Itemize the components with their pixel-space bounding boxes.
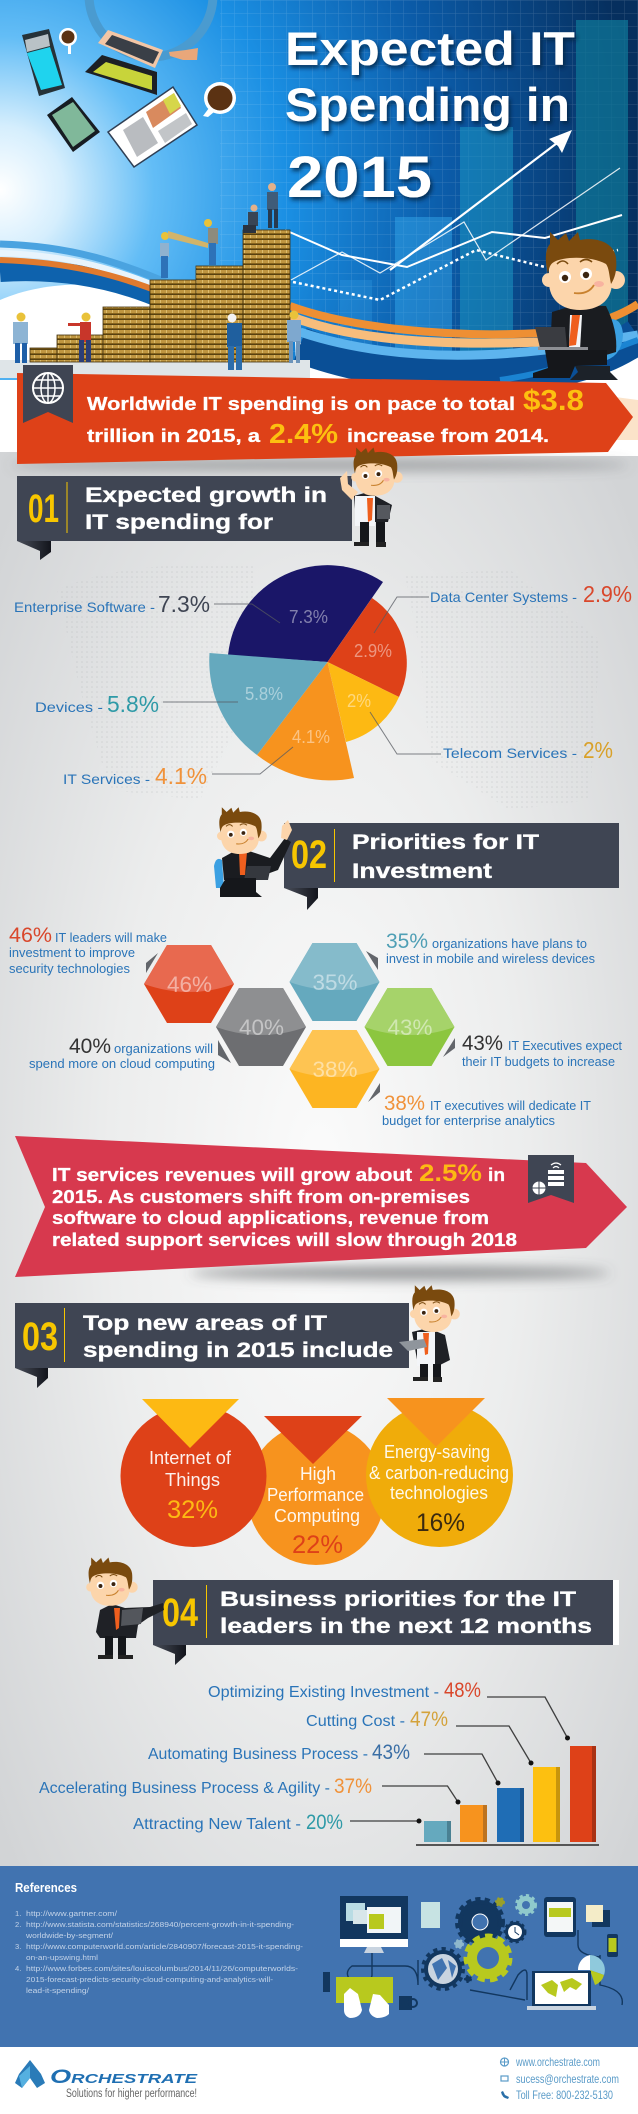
circle: internet of things (120, 1399, 266, 1547)
panel: red headline banner: 2.4% (269, 418, 338, 449)
circle: energy saving: Energy-saving (384, 1441, 490, 1462)
circle: internet of things: Internet of (149, 1447, 232, 1468)
coin stacks (30, 230, 290, 362)
pie labels: Enterprise Software - (14, 599, 155, 615)
icon: globe bookmark (23, 365, 73, 423)
pie labels: 7.3% (158, 591, 210, 617)
pie labels: IT Services - (63, 771, 150, 787)
bar chart: business priorities (350, 1697, 599, 1846)
pie chart: 5.8% (245, 684, 283, 704)
text: 40 percent: organizations will (114, 1041, 213, 1056)
bar chart labels: 48% (444, 1679, 481, 1702)
references list (15, 1880, 304, 1995)
references list: 2015-forecast-predicts-security-cloud-computing-and-analytics-will- (26, 1975, 274, 1984)
character: man with laptop giving ok sign (214, 807, 292, 897)
section 03 heading: spending in 2015 include (83, 1339, 393, 1362)
references list: worldwide-by-segment/ (25, 1931, 114, 1940)
title: Spending in (285, 78, 570, 131)
hexagon 38: 38% (312, 1057, 358, 1082)
bar chart labels: 20% (306, 1811, 343, 1834)
references list: on-an-upswing.html (26, 1953, 98, 1962)
text: 40 percent: 40% (69, 1035, 111, 1058)
pie labels: 2.9% (583, 581, 632, 607)
references list: 3. (15, 1942, 21, 1951)
hexagon 46: 46% (167, 972, 212, 997)
pie chart: 4.1% (292, 727, 330, 747)
pie chart: 2% (347, 691, 371, 711)
section 01 heading: IT spending for (85, 511, 273, 534)
references list: http://www.statista.com/statistics/268940/percent-growth-in-it-spending- (26, 1920, 295, 1929)
bar chart labels: 43% (372, 1741, 410, 1764)
illustration: technology devices and gears (323, 1896, 622, 2018)
section 03 heading: 03 (22, 1315, 58, 1359)
keyboard and hands (323, 1972, 417, 2018)
circle: internet of things: Things (165, 1469, 220, 1490)
hexagon cluster (144, 943, 455, 1108)
panel: crimson callout banner: 2015. As customers shift from on-premises (52, 1187, 470, 1207)
tablet (544, 1897, 576, 1937)
text: 46 percent: investment to improve (9, 945, 135, 960)
circle: high performance computing: Performance (267, 1484, 364, 1505)
panel: red headline banner: Worldwide IT spending is on pace to total (87, 394, 515, 414)
circle: high performance computing: 22% (292, 1531, 343, 1559)
panel: white company footer (0, 2047, 638, 2114)
hexagon 38 (290, 1030, 380, 1108)
text: 43 percent: IT Executives expect (508, 1038, 622, 1053)
circle: energy saving: 16% (416, 1509, 465, 1537)
references list: 4. (15, 1964, 21, 1973)
bar chart labels: Automating Business Process - (148, 1746, 368, 1763)
title (285, 22, 575, 210)
text: 46 percent: IT leaders will make (55, 930, 167, 945)
section 01 heading (17, 476, 352, 560)
panel: red headline banner (10, 365, 633, 471)
section 02 heading: 02 (291, 833, 327, 877)
hexagon 35 (290, 943, 380, 1021)
text: 35 percent: organizations have plans to (432, 936, 587, 951)
contact details: www.orchestrate.com (515, 2055, 600, 2069)
character: man pointing (340, 447, 403, 547)
icon: mail (501, 2076, 508, 2081)
references list: 1. (15, 1909, 21, 1918)
hexagon 35: 35% (312, 970, 358, 995)
document (421, 1902, 440, 1928)
text: 43 percent: their IT budgets to increase (462, 1054, 615, 1069)
background: gray body (0, 440, 638, 1870)
circle: high performance computing: Computing (274, 1505, 360, 1526)
title: Expected IT (285, 22, 575, 75)
section 02 heading: Investment (352, 860, 492, 883)
bar chart labels: 37% (334, 1775, 372, 1798)
bar chart labels: Cutting Cost - (306, 1713, 405, 1730)
hexagon 40 (216, 988, 306, 1066)
text: 35 percent (386, 930, 595, 966)
circle: energy saving (366, 1398, 513, 1547)
section 04 heading: leaders in the next 12 months (220, 1615, 592, 1638)
section 04 heading: 04 (162, 1591, 199, 1635)
pie labels: 4.1% (155, 763, 207, 789)
world map dots (57, 564, 600, 810)
gears (424, 1896, 535, 1988)
hexagon 40: 40% (239, 1015, 284, 1040)
panel: crimson callout banner: 2.5% (419, 1160, 482, 1187)
circle: energy saving: & carbon-reducing (369, 1462, 509, 1483)
bar chart labels: 47% (410, 1708, 448, 1731)
panel: red headline banner: increase from 2014. (347, 426, 549, 446)
character: man with laptop (533, 232, 625, 380)
text: 43 percent (462, 1032, 622, 1069)
text: 38 percent: budget for enterprise analytics (382, 1113, 555, 1128)
pie labels: Data Center Systems - (430, 589, 577, 605)
text: 40 percent (29, 1035, 215, 1071)
section 02 heading (284, 823, 619, 910)
bar chart labels (39, 1679, 481, 1834)
panel: crimson callout banner: related support services will slow through 2018 (52, 1230, 517, 1250)
bar chart labels: Optimizing Existing Investment - (208, 1684, 439, 1701)
pie labels: Devices - (35, 699, 103, 715)
pie labels: 5.8% (107, 691, 159, 717)
contact details (500, 2055, 619, 2102)
logo: Orchestrate: Solutions for higher performance! (66, 2088, 197, 2100)
laptop (527, 1971, 596, 2010)
speech bubbles (586, 1905, 610, 1927)
text: 35 percent: invest in mobile and wireless devices (386, 951, 595, 966)
icon: phone (501, 2091, 509, 2099)
circles: top new areas (120, 1398, 513, 1565)
section 04 heading (153, 1580, 619, 1665)
icon: web (500, 2058, 508, 2066)
hexagon 43 (364, 988, 454, 1066)
pie labels: 2% (583, 737, 613, 763)
pie chart: 2.9% (354, 641, 392, 661)
pie chart (163, 565, 441, 780)
panel: crimson callout banner (15, 1136, 627, 1280)
section 04 heading: Business priorities for the IT (220, 1588, 576, 1611)
text: 46 percent: 46% (9, 924, 52, 947)
references list: http://www.gartner.com/ (26, 1909, 118, 1918)
character: man with tablet (399, 1285, 460, 1382)
section 03 heading (15, 1303, 409, 1388)
bar chart labels: Attracting New Talent - (133, 1816, 301, 1833)
hexagon 46 (144, 945, 234, 1023)
section 01 heading: Expected growth in (85, 484, 327, 507)
section 03 heading: Top new areas of IT (83, 1312, 327, 1335)
hexagon 43: 43% (388, 1015, 432, 1040)
text: 43 percent: 43% (462, 1032, 503, 1055)
text: 38 percent: 38% (384, 1092, 425, 1115)
pie labels (14, 581, 632, 789)
panel: crimson callout banner: in (488, 1165, 505, 1185)
text: 38 percent: IT executives will dedicate IT (430, 1098, 591, 1113)
text: 38 percent (382, 1092, 591, 1128)
pie icon (578, 1955, 605, 1985)
text: 40 percent: spend more on cloud computing (29, 1056, 215, 1071)
character: man presenting (86, 1557, 164, 1659)
pie chart: 7.3% (289, 607, 328, 627)
icons: desk devices from above (22, 0, 236, 167)
logo: Orchestrate (15, 2060, 197, 2100)
references list: lead-it-spending/ (26, 1986, 90, 1995)
panel: references footer (0, 1866, 638, 2047)
circle: high performance computing (247, 1416, 385, 1565)
hero illustration (0, 0, 638, 456)
references list: References (15, 1880, 77, 1895)
panel: crimson callout banner: software to cloud applications, revenue from (52, 1208, 489, 1228)
title: 2015 (287, 145, 432, 210)
panel: crimson callout banner: IT services revenues will grow about (52, 1165, 412, 1185)
panel: red headline banner: trillion in 2015, a (87, 426, 261, 446)
section 01 heading: 01 (28, 487, 59, 531)
references list: http://www.computerworld.com/article/2840907/forecast-2015-it-spending- (26, 1942, 304, 1951)
phone (607, 1934, 618, 1957)
section 02 heading: Priorities for IT (352, 831, 539, 854)
pie labels: Telecom Services - (443, 745, 577, 761)
circle: high performance computing: High (300, 1463, 336, 1484)
references list: 2. (15, 1920, 21, 1929)
workers (13, 183, 301, 370)
logo: Orchestrate: Orchestrate (50, 2067, 197, 2088)
references list: http://www.forbes.com/sites/louiscolumbus/2014/11/26/computerworlds- (26, 1964, 299, 1973)
panel: red headline banner: $3.8 (523, 385, 584, 417)
text: 46 percent (9, 924, 167, 976)
bar chart labels: Accelerating Business Process & Agility - (39, 1780, 330, 1797)
monitor (340, 1896, 408, 1953)
circle: energy saving: technologies (390, 1482, 488, 1503)
text: 35 percent: 35% (386, 930, 428, 953)
text: 46 percent: security technologies (9, 961, 130, 976)
icon: server bookmark (528, 1155, 574, 1203)
circle: internet of things: 32% (167, 1496, 218, 1524)
